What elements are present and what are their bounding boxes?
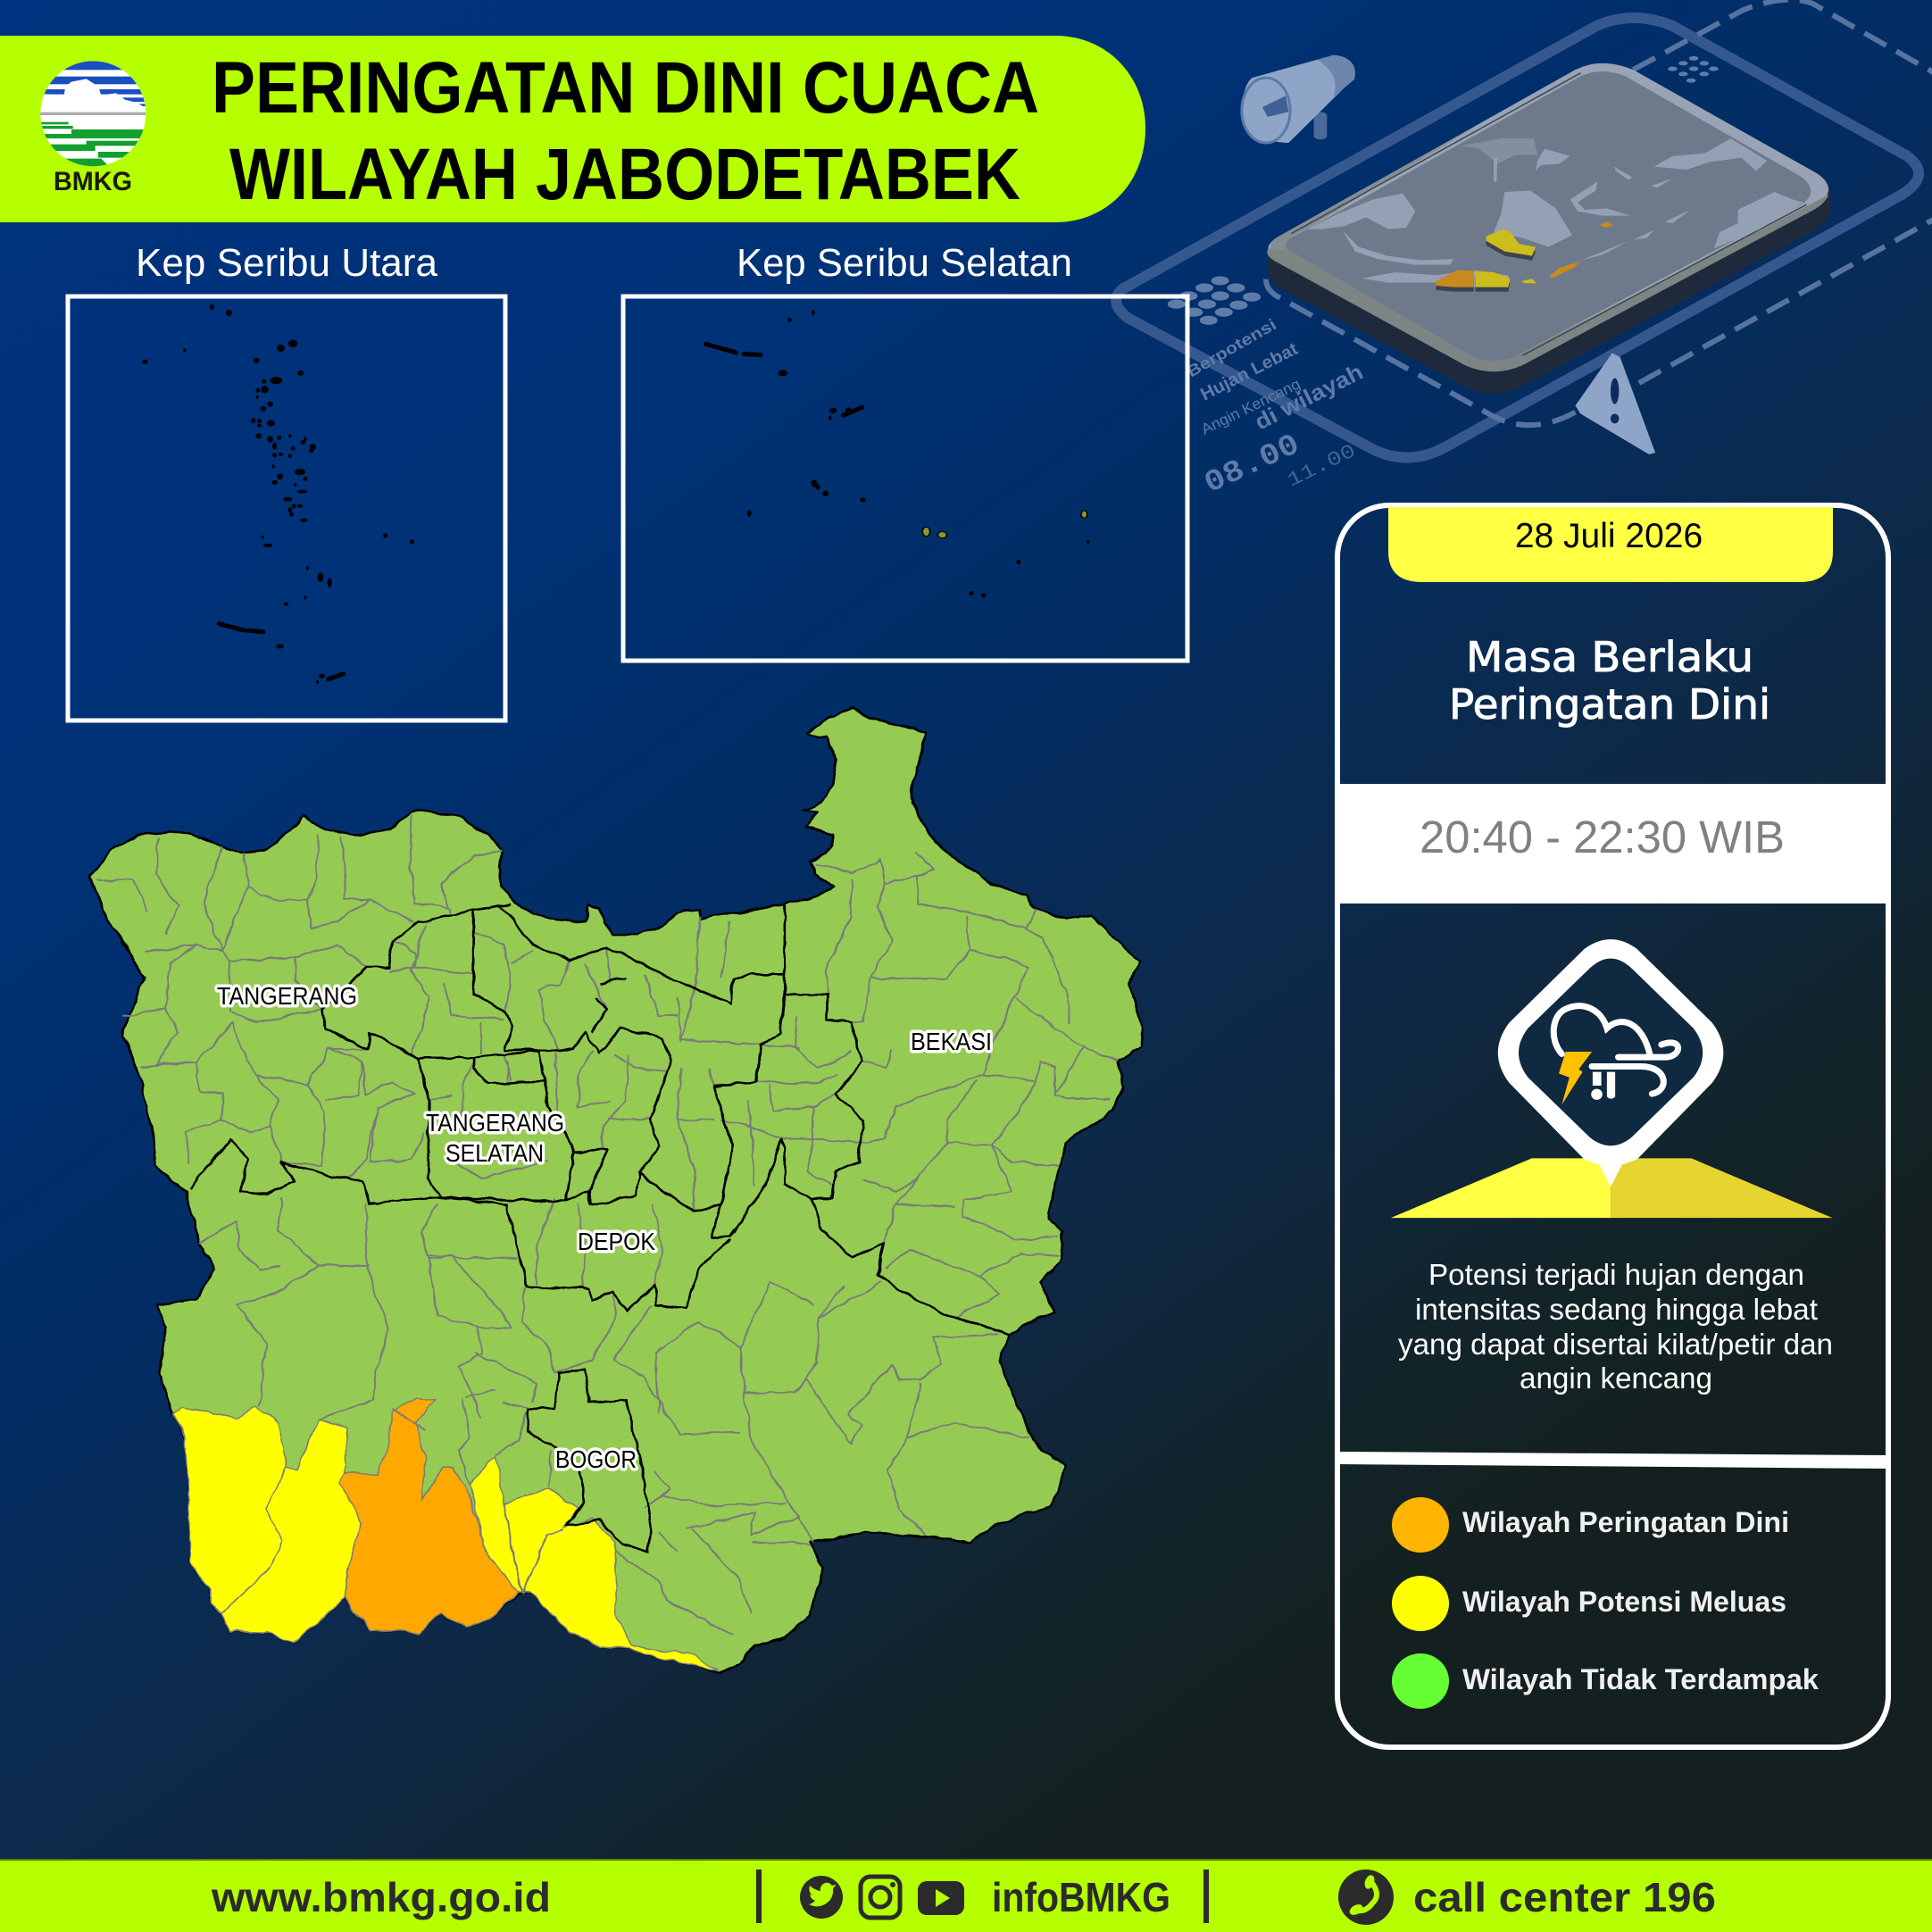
heading: Kep Seribu Selatan: Kep Seribu Selatan [737,241,1072,285]
header banner [0,36,1145,222]
rotated faded text on illustration: 08.00 [1200,429,1305,502]
panel: inset map Kep Seribu Selatan [623,296,1187,661]
icon: BMKG logo [38,58,149,196]
icon: youtube [918,1881,964,1915]
tablet base [1268,187,1831,394]
social handle: infoBMKG [992,1874,1170,1920]
rotated faded text on illustration: Berpotensi [1184,315,1279,380]
label: Tangerang Selatan [426,1109,564,1167]
separator [1203,1870,1209,1923]
heading: Kep Seribu Utara: Kep Seribu Utara [136,241,438,285]
description text: Potensi terjadi hujan dengan [1428,1258,1804,1291]
legend item: peringatan dini [1392,1497,1789,1553]
orange region: peringatan dini [339,1398,518,1633]
title [212,47,1039,215]
divider [1337,1452,1889,1469]
legend item: potensi meluas: Wilayah Potensi Meluas [1462,1586,1786,1618]
icon: dot grids [1168,56,1719,325]
map land base [88,709,1144,1673]
rotated faded text on illustration: di wilayah [1251,359,1367,435]
heading: Masa Berlaku Peringatan Dini [1449,633,1770,729]
website: www.bmkg.go.id [211,1874,551,1920]
title: WILAYAH JABODETABEK [229,134,1020,215]
highlighted regions [1437,221,1613,292]
rotated faded text on illustration: 11.00 [1284,440,1360,492]
description text: intensitas sedang hingga lebat [1415,1293,1818,1326]
card frame [1337,505,1888,1747]
panel: inset map Kep Seribu Utara [68,296,505,720]
legend item: potensi meluas [1392,1576,1786,1631]
kabupaten and city boundaries [188,904,1011,1552]
rotated faded text on illustration: Hujan Lebat [1197,339,1302,404]
label: Bogor: BOGOR [555,1445,637,1473]
landmass [1308,138,1803,287]
legend item: tidak terdampak: Wilayah Tidak Terdampak [1462,1663,1819,1695]
description text: angin kencang [1520,1362,1712,1395]
description text: yang dapat disertai kilat/petir dan [1398,1328,1833,1361]
legend [1392,1497,1819,1709]
date tab: 28 Juli 2026 [1515,517,1703,555]
label: Tangerang Selatan: TANGERANG [426,1109,564,1137]
icon: phone [1338,1870,1394,1925]
tablet map content [1308,138,1803,292]
icon: megaphone [1242,55,1355,143]
date tab [1388,507,1833,582]
district boundaries [96,815,1118,1636]
white band behind time [1337,784,1889,904]
tablet rim [1268,63,1828,371]
heading: Masa Berlaku Peringatan Dini: Peringatan Dini [1449,680,1770,729]
legend item: peringatan dini: Wilayah Peringatan Dini [1462,1506,1789,1538]
decorative tablet illustration [1116,0,1932,458]
description text [1398,1258,1833,1395]
yellow region: potensi meluas [174,1405,718,1671]
separator [756,1870,762,1923]
choropleth map of Jabodetabek [88,709,1144,1673]
title: PERINGATAN DINI CUACA [212,47,1039,129]
time range: 20:40 - 22:30 WIB [1420,812,1785,862]
rotated faded text on illustration [1184,315,1367,502]
icon: twitter [800,1876,843,1919]
icon: warning triangle [1575,353,1655,454]
icon: instagram [861,1877,900,1918]
legend item: tidak terdampak [1392,1653,1819,1709]
heading: Masa Berlaku Peringatan Dini: Masa Berlaku [1466,633,1753,681]
call center: call center 196 [1413,1874,1716,1920]
outer rounded frame [1116,18,1919,458]
rotated faded text on illustration: Angin Kencang [1198,375,1303,438]
icon: weather warning pin [1391,939,1832,1218]
footer bar [0,1859,1932,1932]
icon: BMKG logo: BMKG [54,167,132,196]
tablet screen [1286,71,1811,361]
panel: information card [1337,505,1889,1747]
label: Tangerang Selatan: SELATAN [446,1139,544,1167]
label: Tangerang: TANGERANG [217,982,357,1010]
label: Bekasi: BEKASI [911,1028,992,1055]
dashed frame [1266,0,1932,425]
label: Depok: DEPOK [578,1228,655,1255]
map labels [217,982,992,1473]
